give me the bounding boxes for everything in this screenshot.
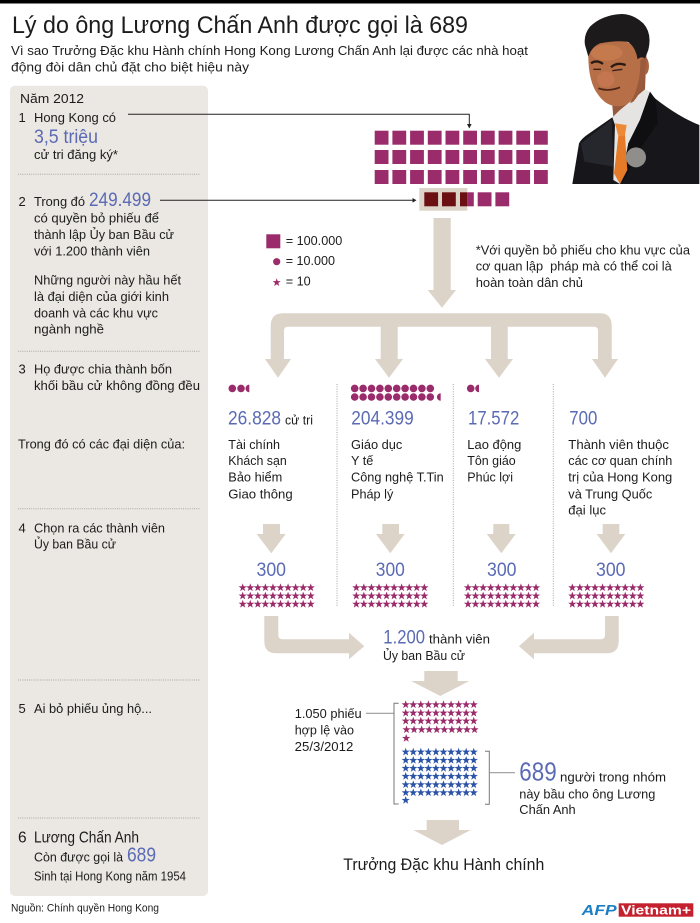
arrow: votes to chief executive [413,820,471,845]
votes label [295,706,362,754]
stars: other votes [402,700,479,742]
logo: AFP Vietnam+: Vietnam+ [621,903,691,918]
footnote: *Với quyền bỏ phiếu cho khu vực của [476,242,691,257]
logo: AFP Vietnam+: AFP [581,902,618,919]
step 3: Trong đó có các đại diện của: [18,436,185,451]
column 3: labour group: Tôn giáo [467,453,516,468]
column 1: finance group: Giao thông [228,486,293,501]
column 2: education group: 204.399 [351,409,414,430]
step 6: Sinh tại Hong Kong năm 1954 [34,869,186,884]
step 2: 249.499 [89,190,151,211]
step 2: Trong đó [34,194,85,209]
column 4: political bodies group: trị của Hong Kong [568,470,672,485]
committee label: thành viên [429,631,490,646]
dots: 17.572 [467,385,479,392]
votes label: 1.050 phiếu [295,706,362,721]
bracket: valid votes [366,703,399,804]
step 2: 2 [18,194,26,209]
step 6: 689 [127,845,156,867]
bracket: 689 votes [485,751,515,804]
callout: 689 [519,757,666,817]
legend [266,233,342,289]
portrait photo: Lương Chấn Anh [572,14,699,184]
callout: 689: Chấn Anh [519,802,576,817]
year label: Năm 2012 [20,91,84,106]
numbers: 300 per sector: 300 [376,560,405,581]
committee label: 1.200 [383,627,425,648]
stars: 300 per sector [239,583,644,608]
column 2: education group: Pháp lý [351,486,394,501]
numbers: 300 per sector: 300 [256,560,286,581]
column 3: labour group: 17.572 [468,409,519,430]
step 6: Lương Chấn Anh [34,830,139,847]
dots: 26.828 [228,385,249,392]
step 2: có quyền bỏ phiếu để [34,211,159,226]
column 2: education group: Giáo dục [351,437,403,452]
step 2: thành lập Ủy ban Bầu cử [34,227,174,242]
step 1: Hong Kong có [34,110,116,125]
footnote: hoàn toàn dân chủ [476,275,583,290]
footnote [476,242,691,290]
step 5: 5 [18,701,26,716]
stars: votes for Lương Chấn Anh [402,748,478,804]
step 3: khối bầu cử không đồng đều [34,378,200,393]
column 1: finance group: Khách sạn [228,453,287,468]
callout: 689: người trong nhóm [560,770,666,785]
committee label: Ủy ban Bầu cử [383,648,465,663]
logo: AFP Vietnam+ [581,902,693,919]
step 2: ngành nghề [34,321,104,336]
legend: = 10.000 [286,253,335,268]
chart: registered voter squares [375,131,548,211]
step 2: doanh và các khu vực [34,305,158,320]
column 4: political bodies group: Thành viên thuộc [568,437,670,452]
step 3: 3 [18,361,26,376]
arrows: column arrows to 300 [257,524,625,553]
committee label [383,627,490,663]
column 3: labour group: Phúc lợi [467,470,513,485]
step 6: 6 [18,830,27,847]
column 1: finance group [228,385,313,501]
column 1: finance group: cử tri [285,413,313,428]
footnote: cơ quan lập pháp mà có thể coi là [476,259,672,274]
column 1: finance group: Bảo hiểm [228,470,282,485]
step 1: 3,5 triệu [34,127,98,148]
step 2: Những người này hầu hết [34,272,181,287]
callout: 689: này bầu cho ông Lương [519,786,655,801]
step 2: với 1.200 thành viên [34,244,150,259]
panel: timeline sidebar [10,86,208,896]
column 4: political bodies group: đại lục [568,502,607,517]
arrow: connector from Hong Kong voters to squares [128,114,472,128]
column 3: labour group: Lao động [467,437,521,452]
numbers: 300 per sector: 300 [487,560,516,581]
arrow: right sectors into committee [519,616,619,659]
numbers: 300 per sector [256,560,626,581]
step 3 [18,361,200,451]
step 4: 4 [18,521,26,536]
step 1: cử tri đăng ký* [34,147,118,162]
step 4 [18,521,165,552]
column 3: labour group [467,385,521,485]
step 1 [18,110,118,162]
result label: Trưởng Đặc khu Hành chính [343,855,544,874]
legend: = 100.000 [286,233,342,248]
numbers: 300 per sector: 300 [596,560,626,581]
column 4: political bodies group: các cơ quan chính [568,453,672,468]
source note: Nguồn: Chính quyền Hong Kong [11,902,159,914]
step 4: Ủy ban Bầu cử [34,536,116,552]
step 6 [18,830,186,884]
step 1: 1 [18,110,26,125]
title: Lý do ông Lương Chấn Anh được gọi là 689 [12,12,468,39]
column 2: education group: Công nghệ T.Tin [351,470,444,485]
column 4: political bodies group: và Trung Quốc [568,486,653,501]
subtitle: động đòi dân chủ đặt cho biệt hiệu này [11,60,250,74]
dots: 204.399 [351,385,441,401]
step 6: Còn được gọi là [34,850,124,865]
column 4: political bodies group [568,409,672,517]
arrow: main down arrow [428,218,456,308]
column 4: political bodies group: 700 [569,409,597,430]
callout: 689: 689 [519,757,557,787]
step 3: Họ được chia thành bốn [34,361,172,376]
subtitle [11,43,528,74]
step 4: Chọn ra các thành viên [34,521,165,536]
arrow: four-way branch [265,313,618,378]
column 2: education group [351,385,444,501]
column dividers [337,384,553,607]
arrow: left sectors into committee [264,616,364,659]
column 1: finance group: Tài chính [228,437,280,452]
step 5: Ai bỏ phiếu ủng hộ... [34,701,152,716]
votes label: hợp lệ vào [295,723,354,738]
votes label: 25/3/2012 [295,739,353,754]
column 1: finance group: 26.828 [228,409,281,430]
step 2: là đại diện của giới kinh [34,289,169,304]
legend: = 10 [286,274,311,289]
arrow: committee to votes [411,671,469,696]
subtitle: Vì sao Trưởng Đặc khu Hành chính Hong Kong Lương Chấn Anh lại được các nhà hoạt [11,43,528,58]
column 2: education group: Y tế [351,453,374,468]
step 2 [18,190,181,336]
arrow: connector from 249.499 to squares [160,198,416,203]
